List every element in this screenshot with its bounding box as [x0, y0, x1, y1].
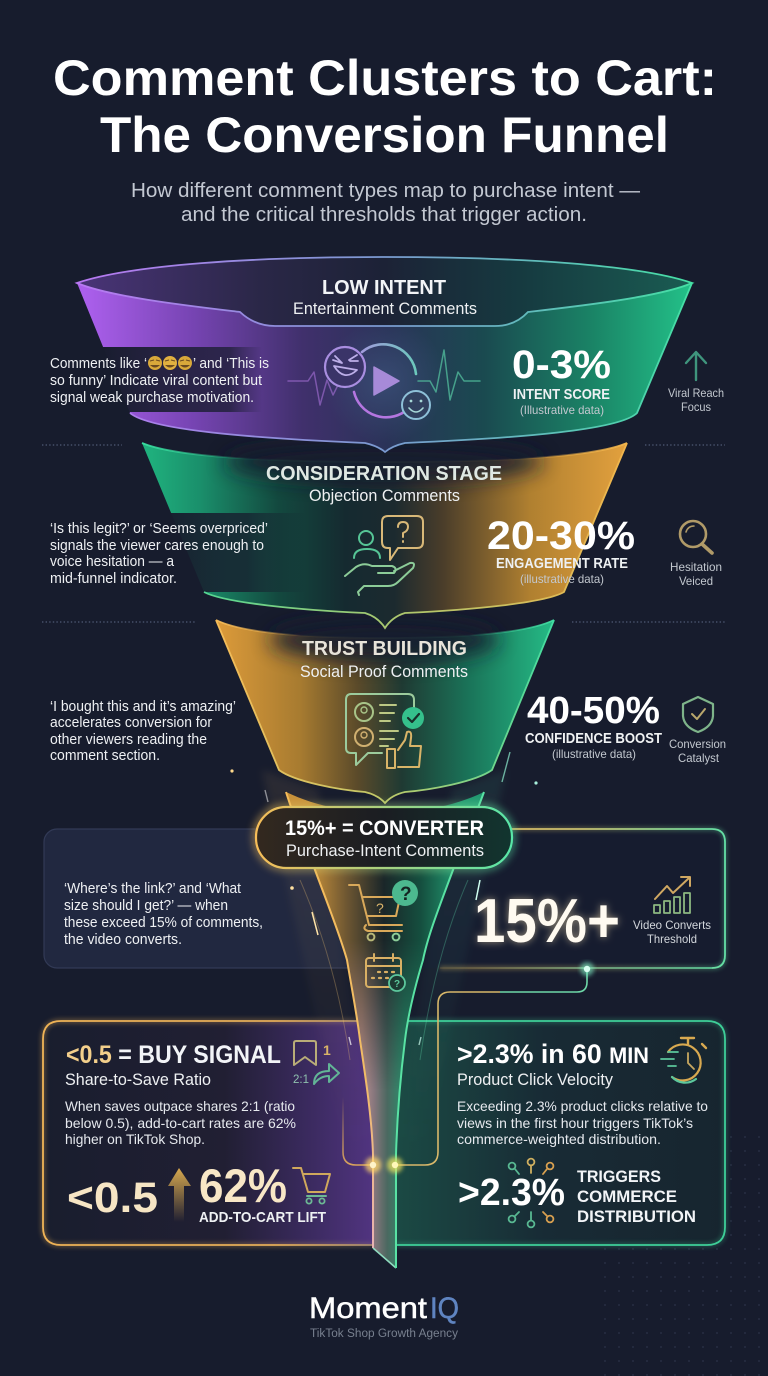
label: viral reach focus: Viral Reach — [668, 386, 724, 400]
label: video converts threshold: Threshold — [647, 932, 697, 946]
stage dividers — [42, 445, 725, 622]
text: trust description: other viewers reading the — [50, 732, 207, 748]
stat: 20-30% engagement rate — [487, 514, 635, 586]
heading: trust building: Social Proof Comments — [300, 663, 468, 681]
text: trust description: accelerates conversion for — [50, 715, 212, 731]
label: conversion catalyst: Catalyst — [678, 751, 720, 765]
text: consideration description: voice hesitation — a — [50, 554, 175, 570]
capsule: 15%+ converter: 15%+ = CONVERTER — [285, 817, 484, 840]
icon: bookmark and share ratio — [293, 1041, 339, 1086]
heading: click velocity: Product Click Velocity — [457, 1071, 614, 1089]
stat: 40-50% confidence boost: CONFIDENCE BOOST — [525, 731, 662, 747]
text: consideration description — [50, 521, 268, 587]
heading: buy signal: Share-to-Save Ratio — [65, 1071, 211, 1089]
logo: MomentIQ: Moment — [309, 1292, 428, 1325]
icon: cart with question badge: ? — [376, 900, 384, 916]
icon: up arrow gold — [168, 1168, 191, 1222]
stat: 0-3% intent score: (Illustrative data) — [520, 403, 604, 417]
capsule: 15%+ converter — [256, 807, 512, 868]
text: click velocity description: views in the first hour triggers TikTok’s — [457, 1115, 693, 1131]
label: hesitation voiced: Veiced — [679, 574, 713, 588]
label: conversion catalyst: Conversion — [669, 737, 726, 751]
icon: cart with question badge: ? — [400, 884, 412, 905]
label: triggers commerce distribution: TRIGGERS — [577, 1167, 661, 1186]
heading: click velocity: >2.3% in 60 MIN — [457, 1039, 649, 1069]
heading: low intent: LOW INTENT — [322, 276, 446, 299]
text: trust description: ‘I bought this and it’s amazing’ — [50, 699, 236, 715]
icon: calendar with question mark: ? — [394, 979, 400, 990]
label: viral reach focus — [668, 386, 724, 414]
text: low intent description: Comments like ‘ — [50, 356, 147, 372]
label: triggers commerce distribution — [577, 1167, 696, 1226]
label: conversion catalyst — [669, 737, 726, 765]
icon: magnifier — [680, 521, 712, 553]
icon: bookmark and share ratio: 1 — [323, 1042, 331, 1058]
text: purchase-intent description: the video converts. — [64, 932, 182, 948]
text: click velocity description — [457, 1098, 708, 1147]
icon: shield check — [683, 697, 713, 732]
text: consideration description: mid-funnel indicator. — [50, 571, 177, 587]
text: low intent description — [50, 356, 269, 406]
text: click velocity description: Exceeding 2.3% product clicks relative to — [457, 1098, 708, 1114]
text: click velocity description: commerce-weighted distribution. — [457, 1131, 661, 1147]
icon: up arrow — [686, 352, 706, 380]
text: trust description: comment section. — [50, 748, 160, 764]
panel: 15% left text panel — [44, 829, 384, 968]
label: video converts threshold — [633, 918, 711, 946]
icon: testimonial card with check and thumb — [346, 694, 424, 768]
text: purchase-intent description — [64, 881, 263, 948]
heading: consideration stage — [266, 462, 502, 505]
label: triggers commerce distribution: COMMERCE — [577, 1187, 677, 1206]
icon: calendar with question mark — [366, 954, 405, 991]
stat: 0-3% intent score — [512, 343, 611, 417]
stat: 20-30% engagement rate: ENGAGEMENT RATE — [496, 555, 628, 572]
text: buy signal description: When saves outpace shares 2:1 (ratio — [65, 1098, 295, 1114]
title: The Conversion Funnel — [100, 107, 669, 163]
icon: growth chart — [654, 877, 690, 913]
stat: 15%+: 15%+ — [474, 887, 620, 956]
stat: 62% add-to-cart lift — [199, 1159, 326, 1226]
dotted background texture — [600, 1130, 768, 1376]
subtitle: and the critical thresholds that trigger action. — [181, 204, 587, 226]
heading: consideration stage: Objection Comments — [309, 487, 460, 505]
heading: buy signal — [65, 1041, 281, 1089]
light rays around funnel stem — [230, 752, 538, 1150]
icon: laughing face, play ring and pulse — [288, 344, 480, 419]
text: low intent description: signal weak purchase motivation. — [50, 390, 254, 406]
connector lines to thresholds — [343, 962, 594, 1173]
text: consideration description: ‘Is this legit?’ or ‘Seems overpriced’ — [50, 521, 268, 537]
label: video converts threshold: Video Converts — [633, 918, 711, 932]
icon: network nodes — [509, 1159, 553, 1227]
capsule: 15%+ converter: Purchase-Intent Comments — [286, 842, 484, 860]
funnel stage 4: stem — [286, 792, 484, 1268]
stat: 0-3% intent score: 0-3% — [512, 343, 611, 387]
icon: stopwatch — [661, 1038, 706, 1083]
heading: buy signal: <0.5 = BUY SIGNAL — [66, 1041, 281, 1069]
stat: 20-30% engagement rate: (illustrative data) — [520, 572, 604, 586]
heading: consideration stage: CONSIDERATION STAGE — [266, 462, 502, 485]
stat: >2.3%: >2.3% — [458, 1172, 565, 1214]
subtitle — [131, 180, 640, 226]
stat: 40-50% confidence boost: 40-50% — [527, 690, 660, 732]
funnel stage 1: low intent — [77, 257, 692, 452]
text: purchase-intent description: ‘Where’s the link?’ and ‘What — [64, 881, 241, 897]
panel: share-to-save ratio — [43, 1021, 373, 1245]
funnel stage 2: consideration — [142, 442, 627, 628]
stat: 20-30% engagement rate: 20-30% — [487, 514, 635, 558]
label: hesitation voiced: Hesitation — [670, 560, 722, 574]
panel: product click velocity — [396, 1021, 725, 1245]
icon: bookmark and share ratio: 2:1 — [293, 1072, 309, 1086]
heading: low intent — [293, 276, 477, 318]
logo: MomentIQ: IQ — [430, 1292, 459, 1325]
title — [53, 50, 717, 163]
text: purchase-intent description: these exceed 15% of comments, — [64, 915, 263, 931]
stat: 40-50% confidence boost — [525, 690, 662, 761]
text: consideration description: signals the viewer cares enough to — [50, 538, 264, 554]
text: buy signal description: higher on TikTok Shop. — [65, 1131, 205, 1147]
icon: cart with question badge — [349, 880, 418, 940]
title: Comment Clusters to Cart: — [53, 50, 717, 106]
panel: 15% threshold right panel — [384, 829, 725, 968]
label: viral reach focus: Focus — [681, 400, 711, 414]
funnel mouth — [77, 257, 692, 326]
label: triggers commerce distribution: DISTRIBUTION — [577, 1207, 696, 1226]
text: purchase-intent description: size should I get?’ — when — [64, 898, 228, 914]
stat: 62% add-to-cart lift: 62% — [199, 1159, 287, 1212]
label: hesitation voiced — [670, 560, 722, 588]
heading: trust building: TRUST BUILDING — [302, 637, 467, 660]
stat: 40-50% confidence boost: (illustrative data) — [552, 747, 636, 761]
stat: <0.5: <0.5 — [67, 1174, 158, 1222]
subtitle: How different comment types map to purchase intent — — [131, 180, 640, 202]
heading: trust building — [300, 637, 468, 681]
funnel stage 3: trust building — [216, 618, 554, 803]
text: buy signal description — [65, 1098, 296, 1147]
icon: person with question bubble and hand — [345, 516, 423, 595]
text: buy signal description: below 0.5), add-to-cart rates are 62% — [65, 1115, 296, 1131]
tagline: TikTok Shop Growth Agency — [310, 1328, 458, 1340]
heading: click velocity — [457, 1039, 649, 1089]
text: low intent description: ’ and ‘This is — [193, 356, 269, 372]
icon: shopping cart — [293, 1168, 330, 1204]
stat: 62% add-to-cart lift: ADD-TO-CART LIFT — [199, 1209, 326, 1226]
stat: 0-3% intent score: INTENT SCORE — [513, 386, 610, 403]
heading: low intent: Entertainment Comments — [293, 300, 477, 318]
text: low intent description: so funny’ Indicate viral content but — [50, 373, 262, 389]
text: trust description — [50, 699, 236, 764]
